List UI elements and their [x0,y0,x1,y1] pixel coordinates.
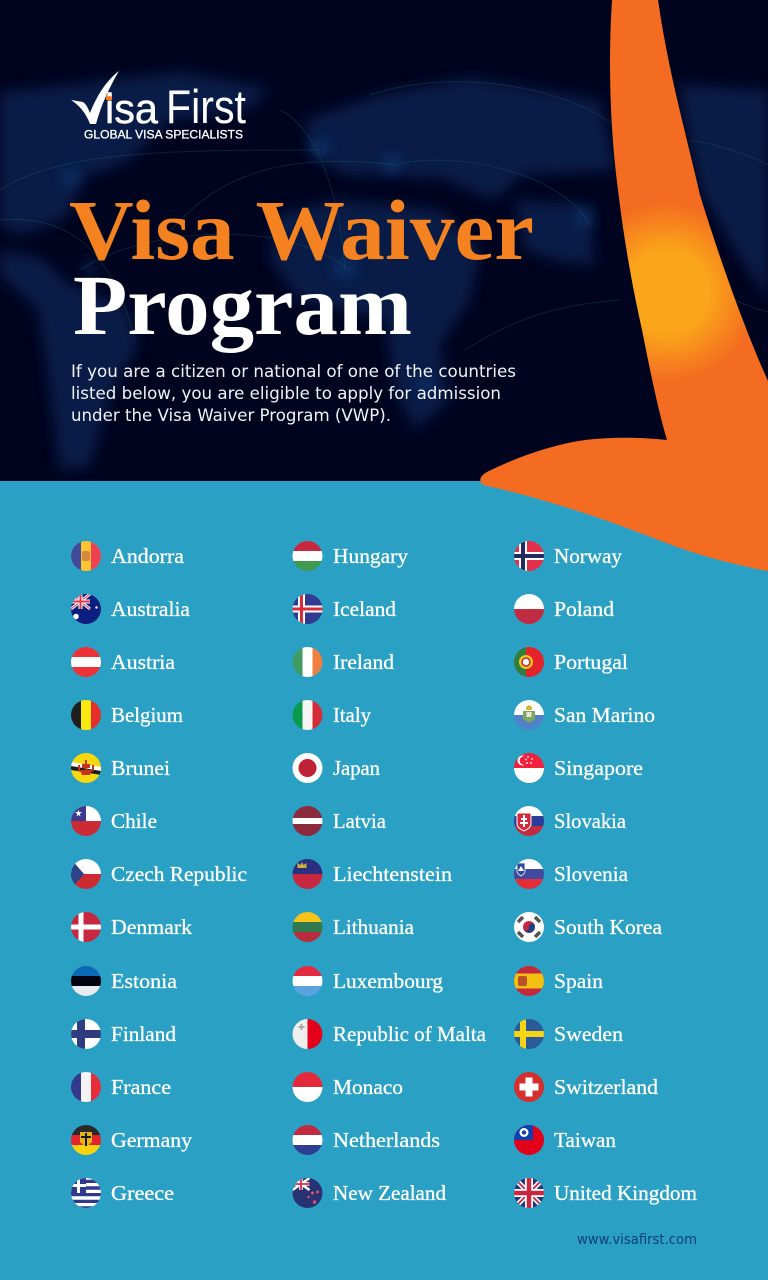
country: United Kingdom: United Kingdom [554,1181,697,1205]
flag: Slovenia [514,859,544,889]
country: Czech Republic: Czech Republic [111,862,247,886]
country: Luxembourg [292,966,443,996]
country: Switzerland: Switzerland [554,1075,659,1099]
country: Hungary [292,541,409,571]
country: Italy: Italy [333,703,371,727]
country: Sweden: Sweden [554,1022,624,1046]
flag: Finland [71,1019,101,1049]
flag: Brunei [71,753,101,783]
flag: Latvia [292,806,322,836]
country: Iceland: Iceland [333,597,397,621]
country: Austria: Austria [111,650,176,674]
country: Monaco: Monaco [333,1075,403,1099]
country: Chile [71,806,157,836]
country: Portugal [514,647,628,677]
country: Chile: Chile [111,809,157,833]
flag: Switzerland [514,1072,544,1102]
country: Slovakia: Slovakia [554,809,627,833]
logo wordmark: isa [105,85,159,132]
flag: Malta [292,1019,322,1049]
country: Slovenia: Slovenia [554,862,629,886]
flag: Italy [292,700,322,730]
country: France [71,1072,171,1102]
country: Latvia [292,806,387,836]
flag: Denmark [71,912,101,942]
flag: Singapore [514,753,544,783]
flag: Estonia [71,966,101,996]
flag: Belgium [71,700,101,730]
country: Estonia: Estonia [111,969,178,993]
flag: Austria [71,647,101,677]
country: Slovenia [514,859,629,889]
flag: Luxembourg [292,966,322,996]
logo tagline: GLOBAL VISA SPECIALISTS [84,130,243,142]
flag: New Zealand [292,1178,322,1208]
country: New Zealand [292,1178,446,1208]
lower blue panel [0,481,768,1280]
country: Andorra: Andorra [111,544,185,568]
country: Sweden [514,1019,624,1049]
country: Latvia: Latvia [333,809,387,833]
flag: Czech Republic [71,859,101,889]
logo wordmark second word: First [166,80,246,133]
country: Liechtenstein [292,859,453,889]
country: Japan [292,753,380,783]
logo: Visa First [71,71,246,142]
country: Norway [514,541,622,571]
country: Monaco [292,1072,403,1102]
flag: South Korea [514,912,544,942]
flag: Chile [71,806,101,836]
country: Switzerland [514,1072,659,1102]
country: Belgium: Belgium [111,703,183,727]
flag: Norway [514,541,544,571]
flag: Hungary [292,541,322,571]
header background: dark world map [0,0,768,481]
country: Liechtenstein: Liechtenstein [333,862,453,886]
country: Finland: Finland [111,1022,177,1046]
country: Slovakia [514,806,627,836]
flag: France [71,1072,101,1102]
flag: Spain [514,966,544,996]
flag: Ireland [292,647,322,677]
country: Spain: Spain [554,969,604,993]
country: South Korea: South Korea [554,915,663,939]
website url: www.visafirst.com [577,1232,697,1248]
logo orange dot [106,94,112,100]
country: United Kingdom [514,1178,697,1208]
country: Ireland [292,647,395,677]
country: Australia [71,594,191,624]
country: Germany: Germany [111,1128,193,1152]
flag: Taiwan [514,1125,544,1155]
country: Denmark [71,912,193,942]
country: Greece: Greece [111,1181,174,1205]
country: Poland [514,594,615,624]
country: Andorra [71,541,185,571]
flag: Andorra [71,541,101,571]
country: Portugal: Portugal [554,650,628,674]
country: France: France [111,1075,171,1099]
country: Japan: Japan [333,756,380,780]
country: Lithuania: Lithuania [333,915,415,939]
country: Singapore [514,753,643,783]
country: South Korea [514,912,663,942]
flag: Monaco [292,1072,322,1102]
country: Italy [292,700,371,730]
flag: Japan [292,753,322,783]
country: San Marino: San Marino [554,703,655,727]
country: Ireland: Ireland [333,650,395,674]
country: Taiwan [514,1125,616,1155]
country: New Zealand: New Zealand [333,1181,446,1205]
country: Germany [71,1125,193,1155]
title: Visa Waiver: Visa Waiver [69,182,534,278]
flag: Poland [514,594,544,624]
country: Poland: Poland [554,597,615,621]
country: Estonia [71,966,178,996]
country: Taiwan: Taiwan [554,1128,616,1152]
intro text: under the Visa Waiver Program (VWP). [71,406,391,426]
flag: Iceland [292,594,322,624]
country: Iceland [292,594,397,624]
flag: United Kingdom [514,1178,544,1208]
flag: Australia [71,594,101,624]
country: Luxembourg: Luxembourg [333,969,443,993]
country: Republic of Malta: Republic of Malta [333,1022,487,1046]
orange swoosh arrow [480,0,768,571]
flag: Germany [71,1125,101,1155]
country: Spain [514,966,604,996]
country: Singapore: Singapore [554,756,643,780]
country: Czech Republic [71,859,247,889]
flag: Portugal [514,647,544,677]
intro text: If you are a citizen or national of one of the countries [71,362,516,382]
intro text: listed below, you are eligible to apply for admission [71,384,501,404]
country: Belgium [71,700,183,730]
country: Brunei [71,753,170,783]
country: Australia: Australia [111,597,191,621]
title: Program: Program [73,257,412,353]
country: Austria [71,647,176,677]
country: Netherlands [292,1125,440,1155]
country: Norway: Norway [554,544,622,568]
flag: Lithuania [292,912,322,942]
country: San Marino [514,700,655,730]
flag: Slovakia [514,806,544,836]
country: Brunei: Brunei [111,756,170,780]
country: Finland [71,1019,177,1049]
country: Hungary: Hungary [333,544,409,568]
country: Netherlands: Netherlands [333,1128,440,1152]
logo check mark [71,71,119,124]
flag: San Marino [514,700,544,730]
flag: Netherlands [292,1125,322,1155]
country: Lithuania [292,912,415,942]
country: Denmark: Denmark [111,915,193,939]
country: Republic of Malta [292,1019,487,1049]
flag: Sweden [514,1019,544,1049]
country: Greece [71,1178,174,1209]
intro text [71,362,516,426]
flag: Greece [71,1178,101,1209]
flag: Liechtenstein [292,859,322,889]
